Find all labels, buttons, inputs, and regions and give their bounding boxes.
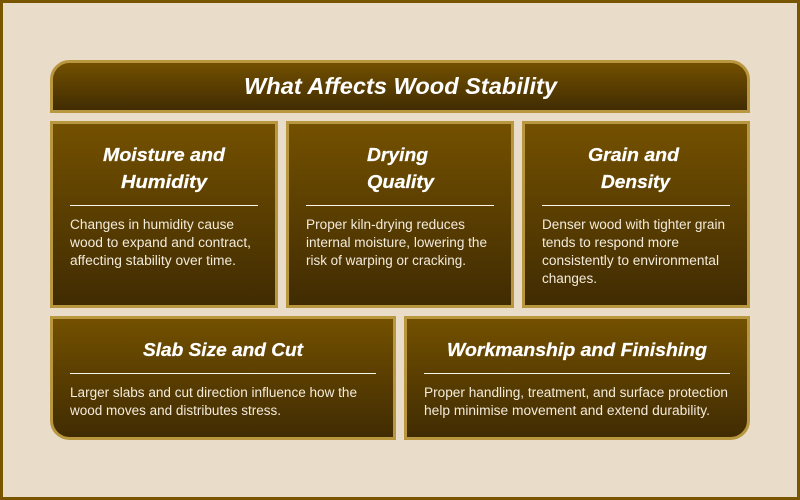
heading: drying quality: Drying bbox=[367, 144, 428, 165]
panel: grain and density bbox=[524, 122, 748, 306]
text: moisture description: wood to expand and contract, bbox=[69, 235, 251, 250]
text: drying description: internal moisture, lowering the bbox=[306, 235, 487, 250]
text: drying description: Proper kiln-drying reduces bbox=[306, 217, 465, 232]
text: grain description bbox=[542, 217, 725, 286]
heading: grain and density: Density bbox=[601, 171, 672, 192]
text: grain description: changes. bbox=[542, 271, 597, 286]
text: workmanship description bbox=[424, 385, 728, 418]
panel: drying quality bbox=[288, 122, 512, 306]
heading: drying quality bbox=[367, 144, 436, 192]
text: grain description: Denser wood with tighter grain bbox=[542, 217, 725, 232]
text: drying description bbox=[306, 217, 487, 268]
text: moisture description: Changes in humidity cause bbox=[70, 217, 234, 232]
heading: grain and density: Grain and bbox=[588, 144, 680, 165]
heading: drying quality: Quality bbox=[367, 171, 436, 192]
heading: moisture and humidity: Humidity bbox=[121, 171, 209, 192]
text: drying description: risk of warping or cracking. bbox=[306, 253, 466, 268]
text: grain description: tends to respond more bbox=[542, 235, 679, 250]
text: grain description: consistently to environmental bbox=[542, 253, 719, 268]
panel: workmanship and finishing bbox=[406, 318, 748, 438]
heading: slab size and cut: Slab Size and Cut bbox=[143, 339, 304, 360]
panel: slab size and cut bbox=[52, 318, 394, 438]
heading: moisture and humidity bbox=[103, 144, 226, 192]
text: slab description: wood moves and distributes stress. bbox=[69, 403, 281, 418]
text: workmanship description: Proper handling, treatment, and surface protection bbox=[424, 385, 728, 400]
title banner bbox=[52, 62, 748, 112]
text: workmanship description: help minimise movement and extend durability. bbox=[424, 403, 710, 418]
text: slab description: Larger slabs and cut direction influence how the bbox=[70, 385, 357, 400]
panel: moisture and humidity bbox=[52, 122, 276, 306]
title: What Affects Wood Stability bbox=[244, 73, 559, 99]
text: slab description bbox=[69, 385, 357, 418]
heading: moisture and humidity: Moisture and bbox=[103, 144, 226, 165]
heading: grain and density bbox=[588, 144, 680, 192]
heading: workmanship and finishing: Workmanship and Finishing bbox=[447, 339, 707, 360]
text: moisture description: affecting stability over time. bbox=[70, 253, 236, 268]
text: moisture description bbox=[69, 217, 251, 268]
